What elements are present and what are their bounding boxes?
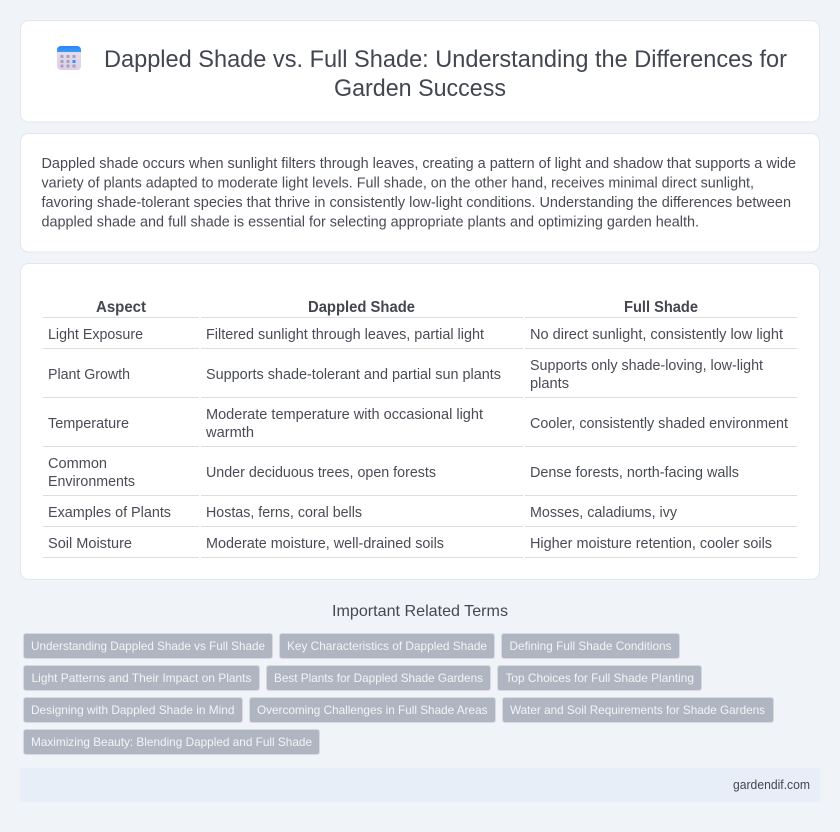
row: examples of plants: Hostas, ferns, coral bells bbox=[206, 505, 362, 521]
title bbox=[104, 46, 787, 102]
row: soil moisture bbox=[48, 536, 772, 552]
tag: Water and Soil Requirements for Shade Gardens bbox=[510, 703, 765, 717]
row: plant growth: Plant Growth bbox=[48, 367, 130, 383]
row: examples of plants: Mosses, caladiums, ivy bbox=[530, 505, 678, 521]
row: soil moisture: Higher moisture retention, cooler soils bbox=[530, 536, 772, 552]
table header row: Dappled Shade bbox=[308, 299, 415, 316]
panel: comparison table bbox=[20, 264, 820, 580]
tag bbox=[24, 698, 242, 722]
row: temperature bbox=[48, 407, 788, 441]
row: examples of plants: Examples of Plants bbox=[48, 505, 171, 521]
tag bbox=[24, 634, 272, 658]
footer: gardendif.com bbox=[733, 778, 810, 792]
row: common environments: Common bbox=[48, 456, 107, 472]
tag bbox=[502, 634, 680, 658]
tag: Light Patterns and Their Impact on Plants bbox=[32, 671, 252, 685]
row: common environments bbox=[48, 456, 739, 490]
text block: intro: variety of plants adapted to moderate light levels. Full shade, on the other hand, receives minimal direct sunlight, bbox=[42, 176, 754, 192]
tag bbox=[24, 666, 260, 690]
text block: intro bbox=[42, 156, 796, 230]
text block: intro: favoring shade-tolerant species that thrive in consistently low-light conditions. Understanding the differences between bbox=[42, 195, 791, 211]
row: plant growth: Supports shade-tolerant and partial sun plants bbox=[206, 367, 501, 383]
row: temperature: Cooler, consistently shaded environment bbox=[530, 416, 788, 432]
row: examples of plants bbox=[48, 505, 678, 521]
row: common environments: Environments bbox=[48, 474, 135, 490]
row: common environments: Dense forests, north-facing walls bbox=[530, 465, 739, 481]
panel: title header bbox=[20, 20, 820, 122]
row: plant growth: plants bbox=[530, 376, 569, 392]
row: light exposure: Light Exposure bbox=[48, 327, 143, 343]
row: temperature: warmth bbox=[205, 425, 254, 441]
title: Dappled Shade vs. Full Shade: Understanding the Differences for bbox=[104, 46, 787, 73]
panel: intro paragraph bbox=[20, 134, 820, 252]
row: light exposure: No direct sunlight, consistently low light bbox=[530, 327, 783, 343]
tag: Maximizing Beauty: Blending Dappled and Full Shade bbox=[31, 735, 312, 749]
tag: Overcoming Challenges in Full Shade Areas bbox=[257, 703, 488, 717]
row: temperature: Moderate temperature with occasional light bbox=[206, 407, 483, 423]
table header row: Full Shade bbox=[624, 299, 698, 316]
tag bbox=[24, 730, 320, 754]
icon: calendar bbox=[57, 46, 81, 70]
tag bbox=[266, 666, 490, 690]
tag: Defining Full Shade Conditions bbox=[510, 639, 672, 653]
title: Garden Success bbox=[334, 75, 506, 102]
row: common environments: Under deciduous trees, open forests bbox=[206, 465, 436, 481]
text block: intro: Dappled shade occurs when sunlight filters through leaves, creating a pattern of light and shadow that supports a wide bbox=[42, 156, 796, 172]
tag: Top Choices for Full Shade Planting bbox=[506, 671, 694, 685]
row: light exposure: Filtered sunlight through leaves, partial light bbox=[206, 327, 484, 343]
row: soil moisture: Moderate moisture, well-drained soils bbox=[206, 536, 444, 552]
row: plant growth: Supports only shade-loving, low-light bbox=[530, 358, 763, 374]
heading: important related terms: Important Related Terms bbox=[332, 603, 508, 620]
tag: Key Characteristics of Dappled Shade bbox=[287, 639, 487, 653]
row: temperature: Temperature bbox=[48, 416, 129, 432]
tag bbox=[250, 698, 496, 722]
table header row bbox=[96, 299, 698, 316]
tag: Best Plants for Dappled Shade Gardens bbox=[274, 671, 483, 685]
row: soil moisture: Soil Moisture bbox=[48, 536, 132, 552]
tag bbox=[502, 698, 774, 722]
tag: Designing with Dappled Shade in Mind bbox=[31, 703, 234, 717]
footer bbox=[20, 768, 820, 802]
table header row: Aspect bbox=[96, 299, 147, 316]
tag: Understanding Dappled Shade vs Full Shade bbox=[31, 639, 265, 653]
row: plant growth bbox=[48, 358, 763, 392]
tag bbox=[280, 634, 494, 658]
tag bbox=[498, 666, 702, 690]
text block: intro: dappled shade and full shade is essential for selecting appropriate plants and optimizing garden health. bbox=[42, 214, 699, 230]
tag list bbox=[24, 634, 774, 754]
row: light exposure bbox=[48, 327, 783, 343]
